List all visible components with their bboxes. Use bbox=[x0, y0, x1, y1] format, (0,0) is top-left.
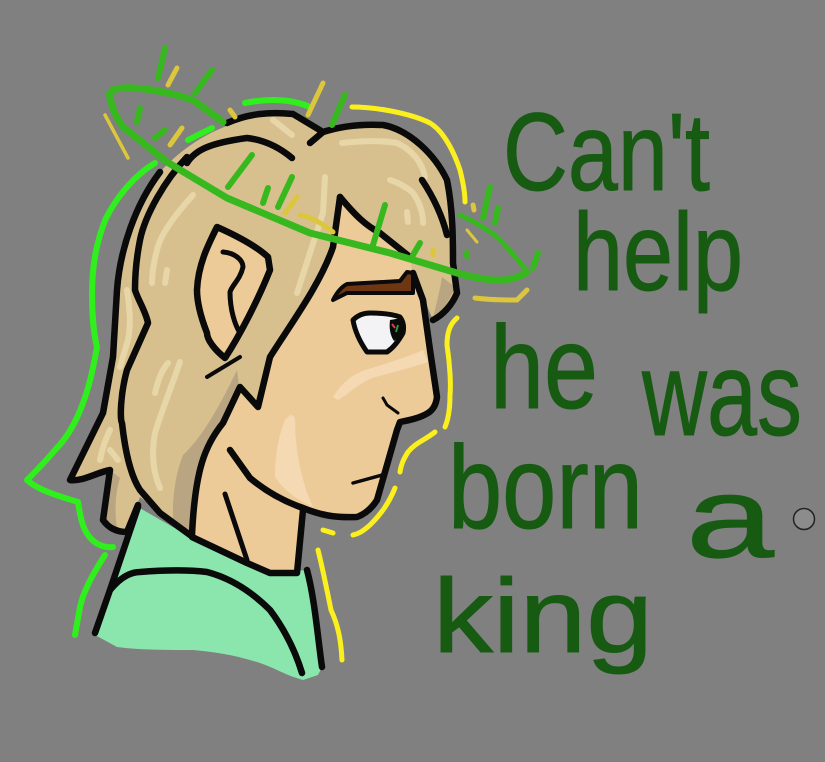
eyebrow bbox=[333, 272, 413, 300]
halo bbox=[110, 88, 527, 280]
glow outline: yellow bbox=[318, 107, 465, 660]
hair bbox=[70, 114, 457, 535]
black line art bbox=[70, 113, 457, 673]
caption word: he: he bbox=[490, 302, 598, 434]
caption word: king: king bbox=[433, 558, 653, 675]
halo sparks: gold bbox=[105, 68, 527, 300]
handwritten caption bbox=[433, 91, 802, 675]
shirt bbox=[95, 507, 322, 680]
cursor circle bbox=[794, 508, 814, 530]
caption word: born: born bbox=[448, 422, 643, 554]
caption word: help: help bbox=[573, 191, 743, 314]
face highlights bbox=[275, 350, 428, 507]
ear bbox=[197, 227, 270, 358]
face and neck bbox=[192, 197, 437, 573]
hair highlights bbox=[100, 120, 425, 488]
glow outline: bright green bbox=[27, 100, 310, 635]
caption word: a: a bbox=[686, 454, 774, 582]
caption word: Can't: Can't bbox=[503, 91, 710, 214]
eye bbox=[353, 313, 404, 352]
hair shading bbox=[106, 277, 455, 535]
halo sparks: green bbox=[137, 48, 538, 268]
